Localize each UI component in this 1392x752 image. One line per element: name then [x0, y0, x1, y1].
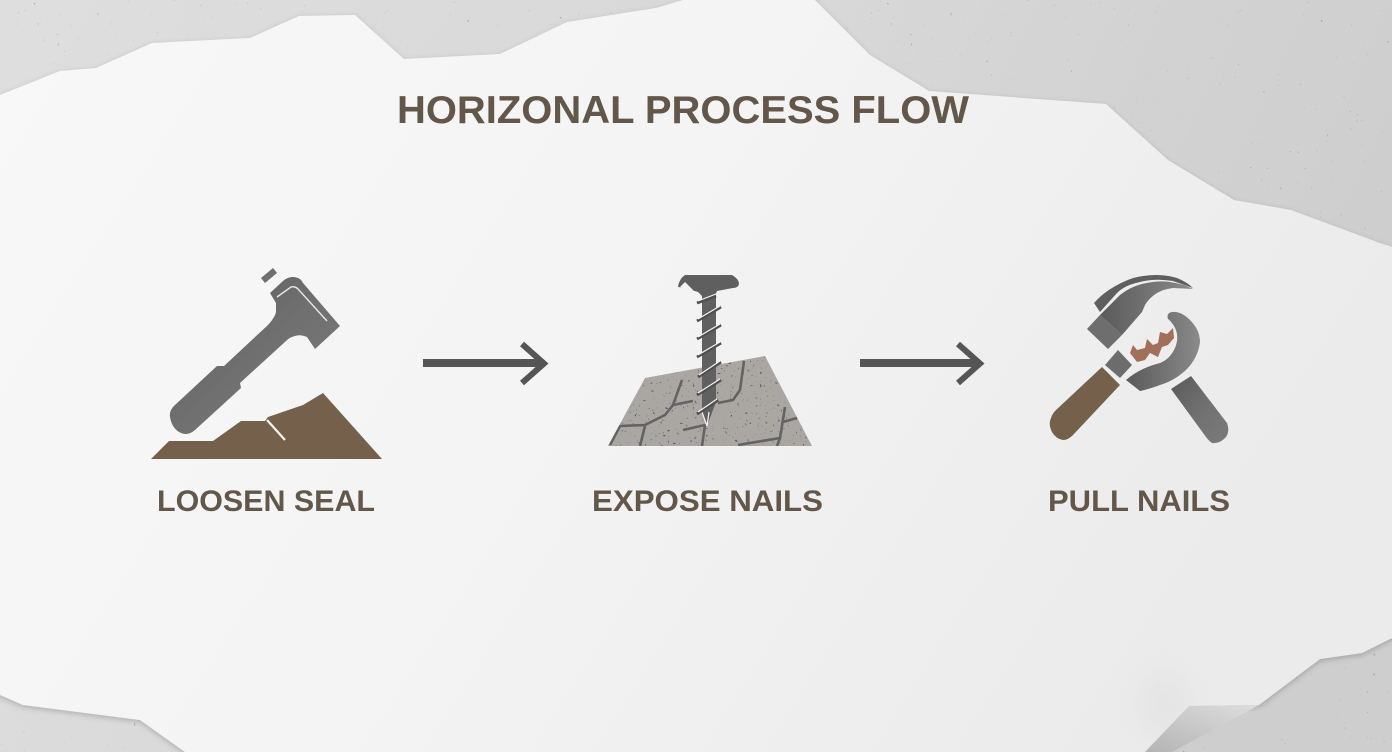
paper fold: bottom right corner	[1145, 673, 1259, 752]
arrow: step 2 to step 3	[860, 344, 980, 383]
title: HORIZONAL PROCESS FLOW	[397, 89, 969, 132]
label: pull nails: PULL NAILS	[1048, 485, 1230, 518]
label: loosen seal: LOOSEN SEAL	[157, 485, 375, 518]
arrow: step 1 to step 2	[423, 344, 544, 383]
icon: pry hammer	[170, 268, 340, 434]
step 1: loosen seal	[151, 268, 382, 518]
step 2: expose nails	[592, 275, 823, 518]
icon: cracked shingle	[608, 356, 812, 446]
label: expose nails: EXPOSE NAILS	[592, 485, 823, 518]
icon: claw hammer and pulled nails	[1050, 275, 1228, 443]
icon: lifted shingle seal	[151, 393, 382, 459]
step 3: pull nails	[1048, 275, 1230, 518]
icon: screw nail	[678, 275, 739, 426]
